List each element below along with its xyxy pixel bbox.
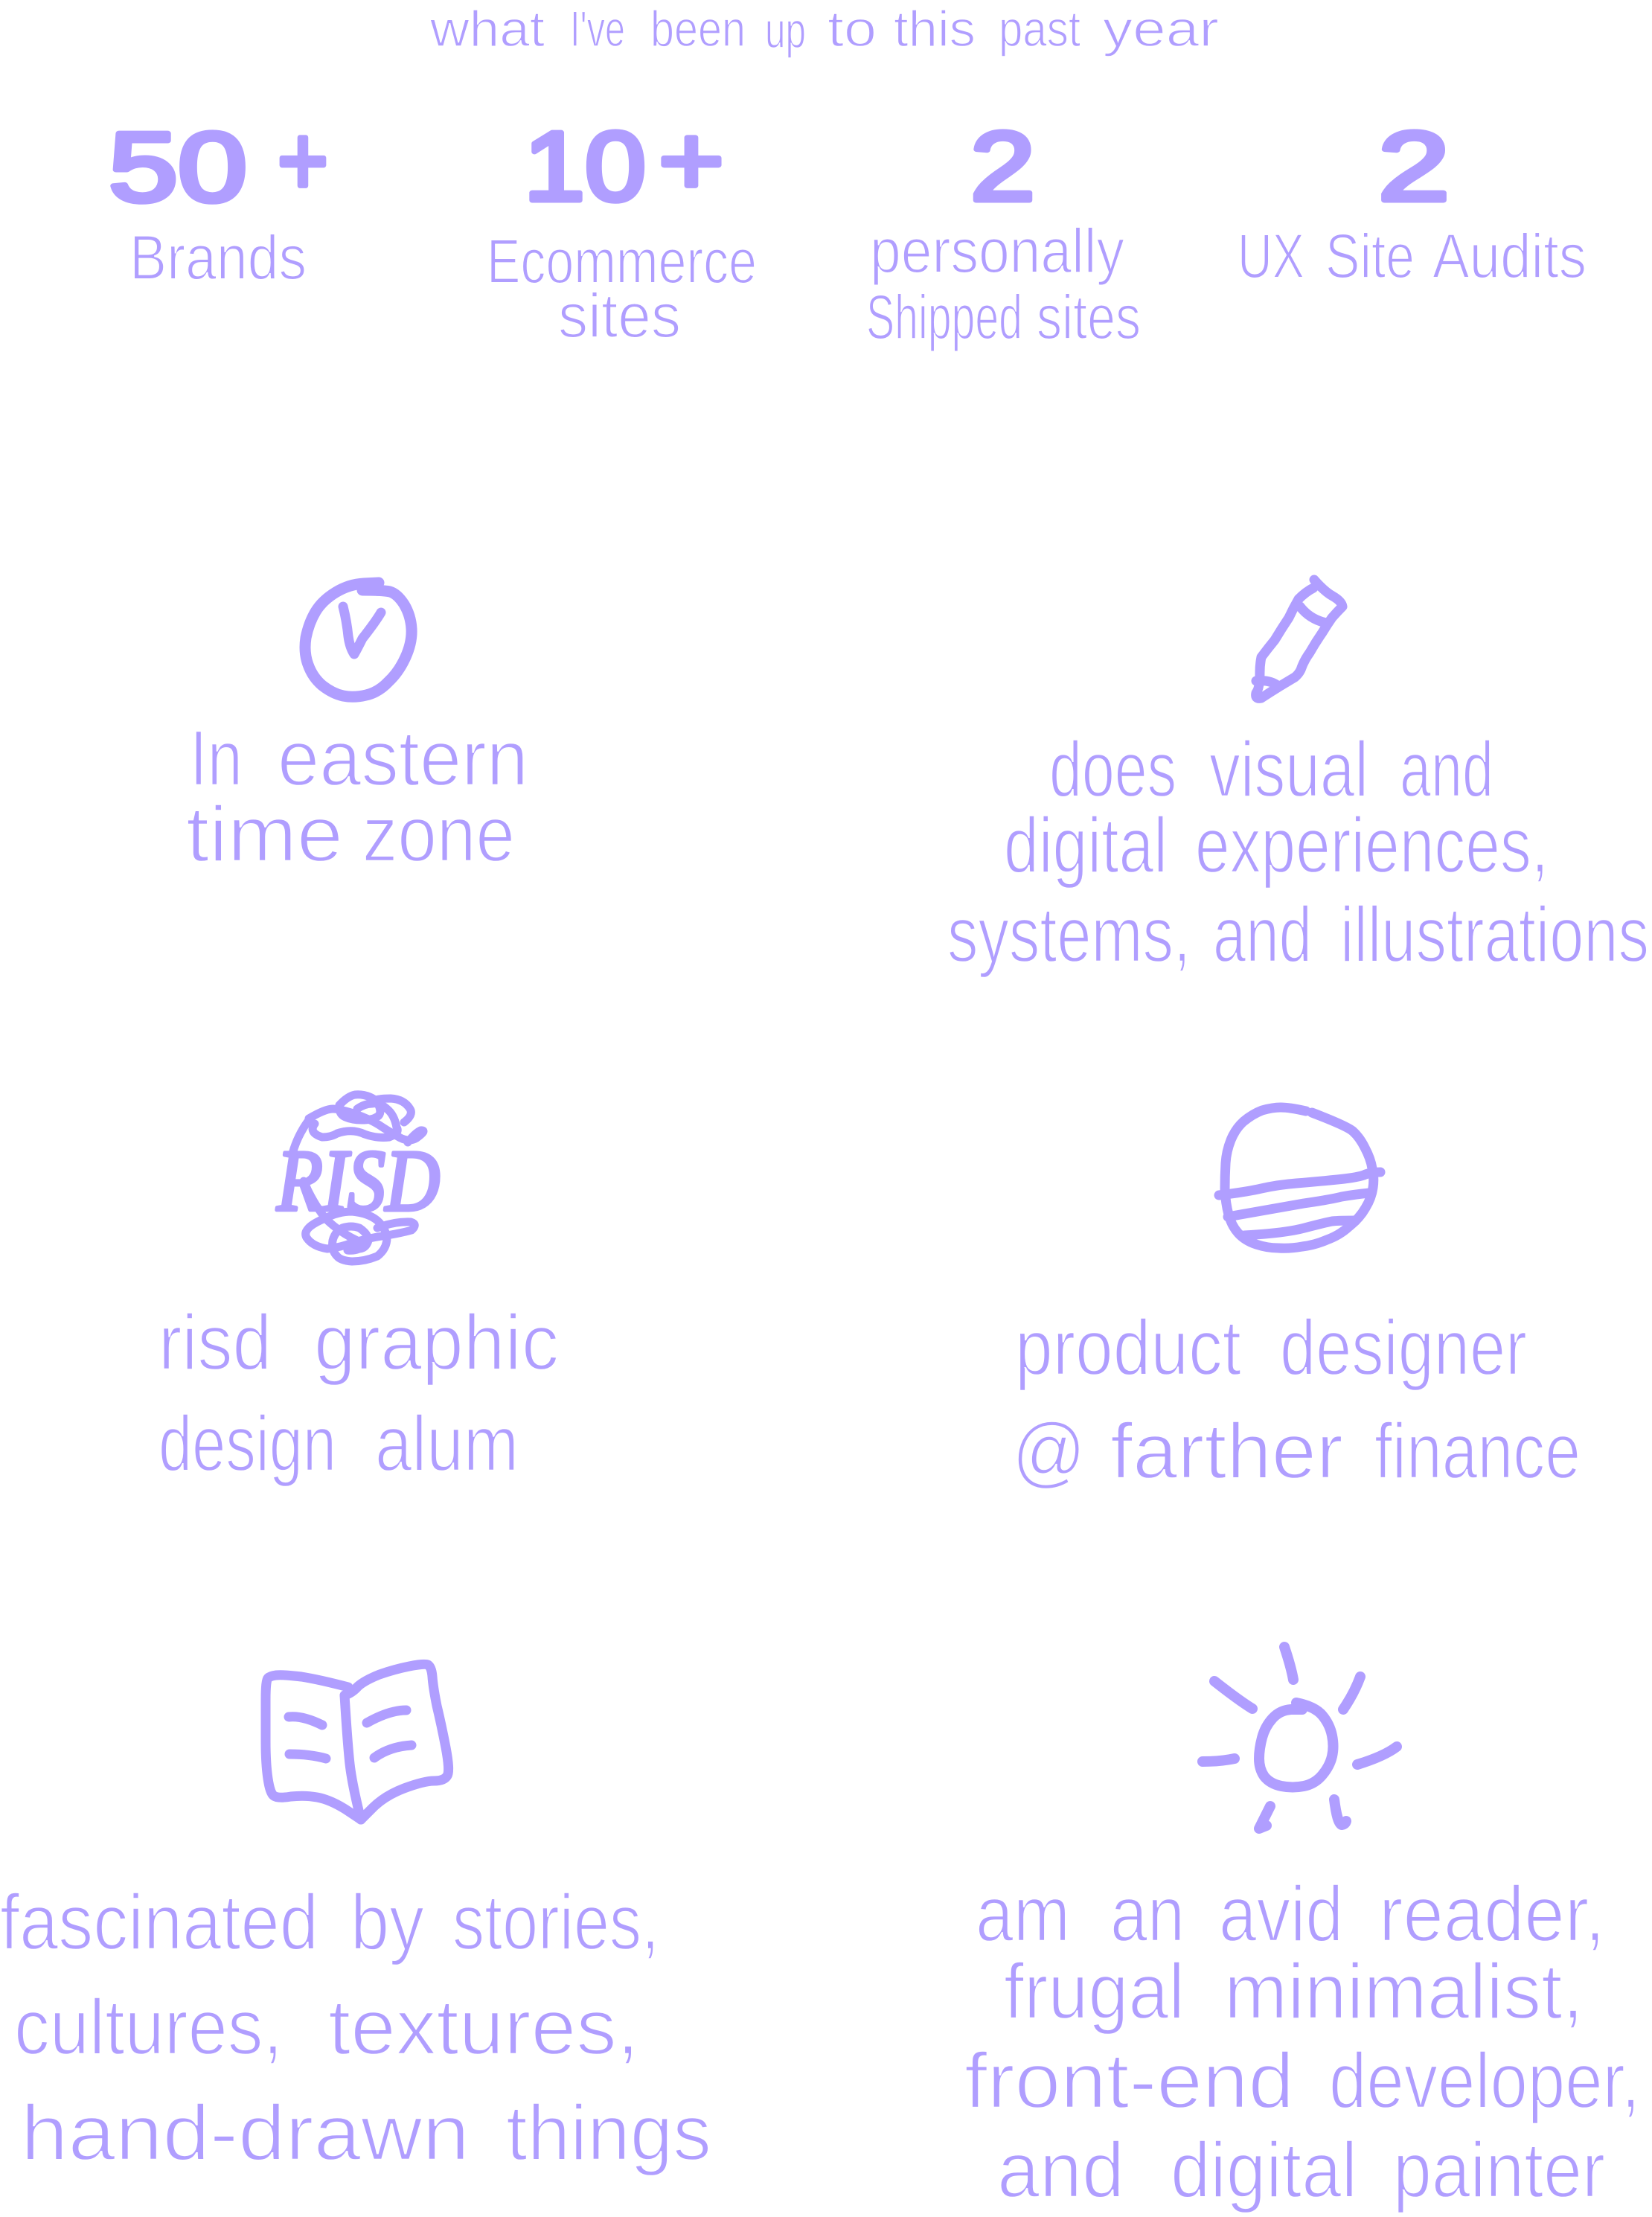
title: past (999, 1, 1080, 57)
stat: 2 UX site audits: Audits (1432, 221, 1587, 291)
text: in eastern time zone: zone (362, 790, 515, 878)
text: does visual and digital experiences: systems, (947, 891, 1191, 979)
title: I've (570, 1, 625, 57)
text: am an avid reader, frugal minimalist, front-end developer, and digital painter: am (976, 1870, 1070, 1958)
text: am an avid reader, frugal minimalist, front-end developer, and digital painter: reader, (1379, 1870, 1605, 1958)
stat: 2 personally shipped sites: personally (870, 216, 1124, 286)
text: risd graphic design alum: alum (375, 1400, 519, 1488)
stat: 2 UX site audits: Site (1325, 221, 1415, 291)
text: risd graphic design alum: risd (159, 1299, 272, 1386)
text: am an avid reader, frugal minimalist, front-end developer, and digital painter: minimalist, (1224, 1948, 1584, 2035)
text: in eastern time zone (186, 714, 528, 878)
title: year (1103, 1, 1219, 57)
stat: 10+ ecommerce sites: 10 (524, 112, 646, 221)
text: risd graphic design alum (159, 1299, 559, 1488)
title: this (894, 1, 976, 57)
text: am an avid reader, frugal minimalist, front-end developer, and digital painter: and (997, 2126, 1124, 2214)
text: fascinated by stories, cultures, textures, hand-drawn things: cultures, (14, 1983, 283, 2071)
text: product designer at farther finance (1012, 1304, 1581, 1495)
text: am an avid reader, frugal minimalist, front-end developer, and digital painter (964, 1870, 1640, 2214)
text: does visual and digital experiences: does (1049, 726, 1176, 813)
text: fascinated by stories, cultures, textures, hand-drawn things: hand-drawn (21, 2089, 470, 2177)
stat: 50+ brands: 50 (109, 112, 247, 222)
text: fascinated by stories, cultures, textures, hand-drawn things: textures, (328, 1983, 639, 2071)
title: been (650, 1, 746, 57)
stat: 2 personally shipped sites: Shipped (866, 282, 1022, 352)
icon: sun (1203, 1647, 1397, 1829)
panel: risd alum (159, 1095, 559, 1488)
text: fascinated by stories, cultures, textures, hand-drawn things: stories, (452, 1878, 659, 1966)
text: product designer at farther finance: finance (1374, 1407, 1581, 1495)
text: does visual and digital experiences: and (1213, 891, 1312, 979)
text: fascinated by stories, cultures, textures, hand-drawn things: fascinated (0, 1878, 318, 1966)
text: product designer at farther finance: product (1015, 1304, 1241, 1392)
text: am an avid reader, frugal minimalist, front-end developer, and digital painter: digital (1171, 2126, 1357, 2214)
text: risd graphic design alum: graphic (314, 1299, 559, 1386)
icon: RISD scribble (276, 1095, 440, 1261)
text: does visual and digital experiences: visual (1209, 726, 1368, 813)
text: product designer at farther finance: farther (1110, 1407, 1343, 1495)
stat: 50+ brands: + (278, 106, 328, 215)
stat: 50+ brands (109, 106, 328, 292)
text: am an avid reader, frugal minimalist, front-end developer, and digital painter: frugal (1004, 1948, 1185, 2035)
text: product designer at farther finance: @ (1012, 1407, 1086, 1495)
text: does visual and digital experiences: and (1400, 726, 1493, 813)
stat: 2 personally shipped sites: 2 (970, 112, 1035, 221)
stat: 2 personally shipped sites (866, 112, 1141, 352)
text: in eastern time zone: In (190, 714, 243, 802)
text: in eastern time zone: eastern (278, 714, 528, 802)
stat: 10+ ecommerce sites: Ecommerce (487, 226, 757, 296)
icon: open book (266, 1664, 449, 1820)
icon: pencil (1256, 580, 1342, 698)
text: does visual and digital experiences: experiences, (1195, 802, 1549, 889)
panel: product designer (1012, 1107, 1581, 1495)
title (429, 1, 1219, 59)
icon: planet stripes (1219, 1107, 1380, 1248)
title: what (429, 1, 545, 57)
text: risd graphic design alum: design (159, 1400, 336, 1488)
text: in eastern time zone: time (186, 790, 343, 878)
panel: visual and digital experiences (947, 580, 1649, 979)
panel: avid reader (964, 1647, 1640, 2214)
stat: 50+ brands: Brands (129, 223, 307, 292)
stat: 10+ ecommerce sites: + (659, 106, 724, 215)
stat: 2 UX site audits (1238, 112, 1587, 291)
text: does visual and digital experiences: digital (1004, 802, 1168, 889)
text: fascinated by stories, cultures, textures, hand-drawn things: things (506, 2089, 711, 2177)
text: am an avid reader, frugal minimalist, front-end developer, and digital painter: an (1110, 1870, 1185, 1958)
text: am an avid reader, frugal minimalist, front-end developer, and digital painter: front-end (964, 2037, 1294, 2125)
stat: 10+ ecommerce sites: sites (558, 281, 681, 351)
text: fascinated by stories, cultures, textures, hand-drawn things: by (350, 1878, 424, 1966)
text: fascinated by stories, cultures, textures, hand-drawn things (0, 1878, 711, 2177)
text: am an avid reader, frugal minimalist, front-end developer, and digital painter: painter (1393, 2126, 1605, 2214)
text: am an avid reader, frugal minimalist, front-end developer, and digital painter: avid (1219, 1870, 1343, 1958)
stat: 2 UX site audits: 2 (1378, 112, 1450, 221)
title: up (765, 2, 806, 59)
panel: fascinated by stories (0, 1664, 711, 2177)
text: product designer at farther finance: designer (1280, 1304, 1527, 1392)
stat: 10+ ecommerce sites (487, 106, 757, 351)
text: does visual and digital experiences (947, 726, 1649, 979)
icon: RISD scribble: RISD (276, 1132, 440, 1229)
icon: clock (305, 583, 412, 697)
panel: eastern time zone (186, 583, 528, 878)
title: to (827, 1, 877, 57)
stat: 2 UX site audits: UX (1238, 221, 1304, 291)
stat: 2 personally shipped sites: sites (1037, 282, 1141, 352)
